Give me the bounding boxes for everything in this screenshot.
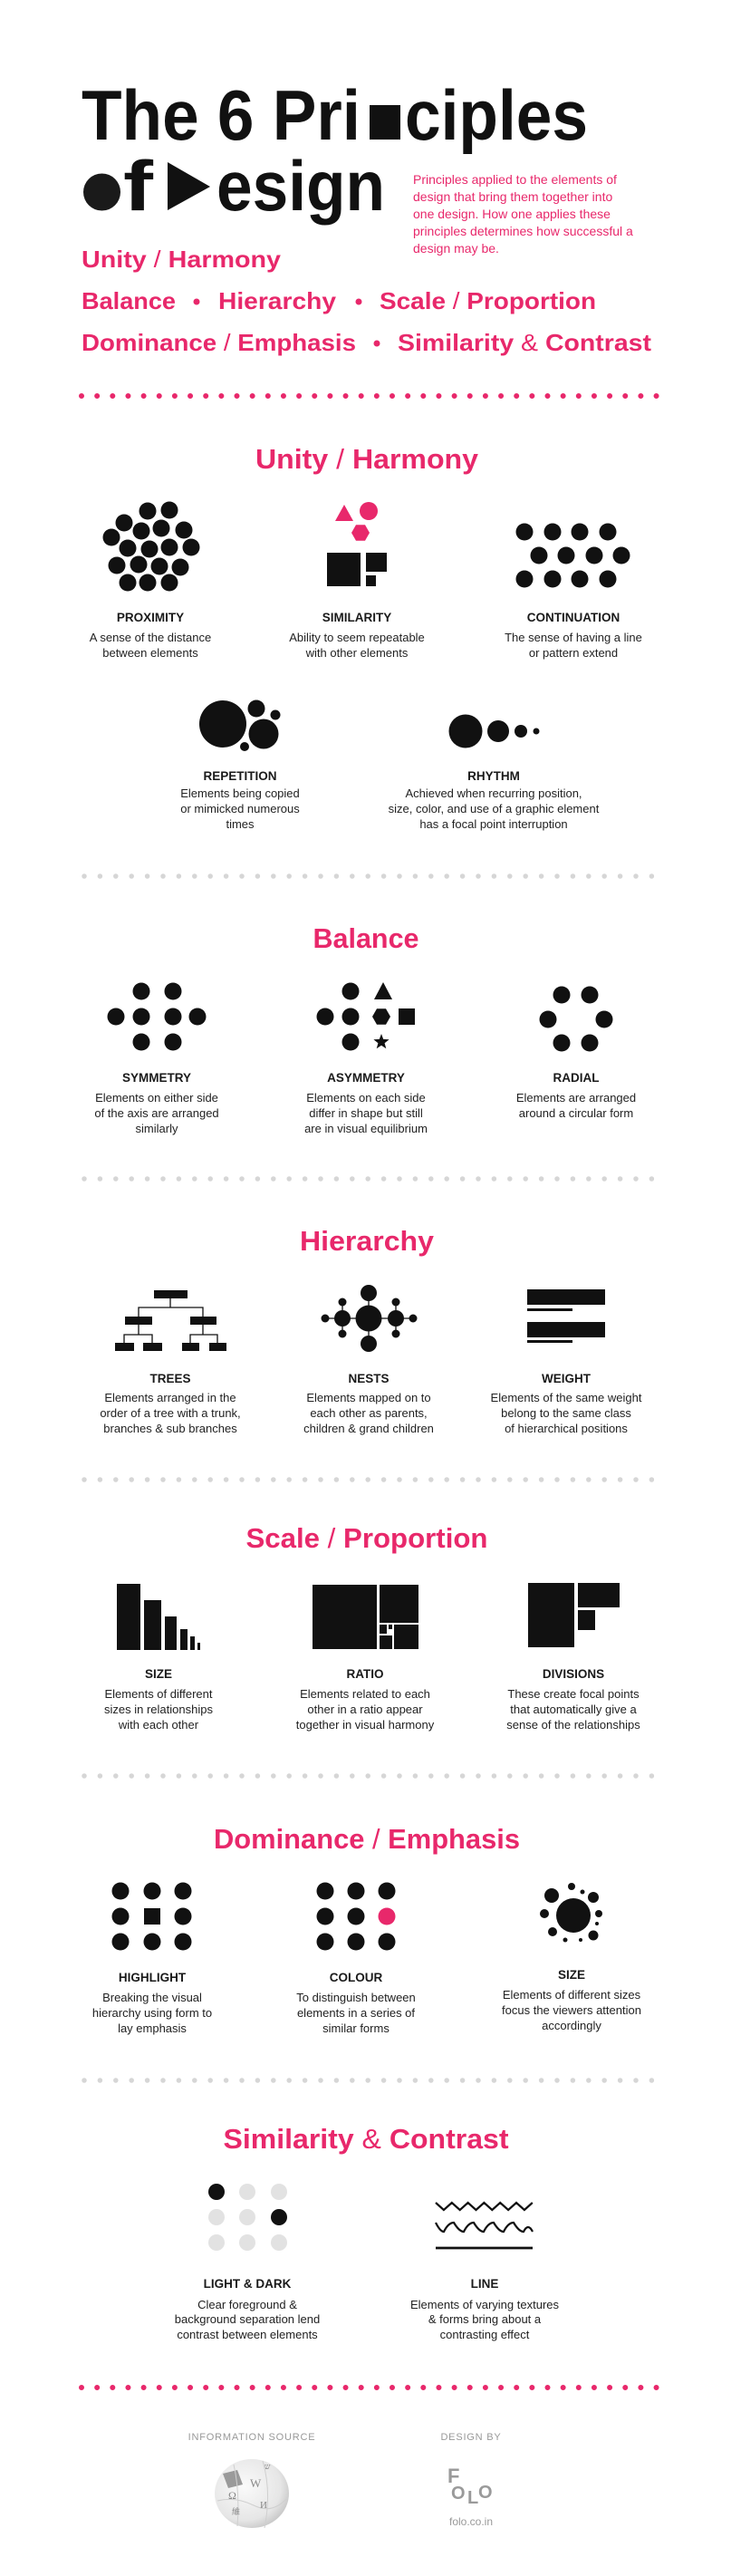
icon: wikipedia globe [215,2459,289,2528]
text: light and dark: contrast between elements [177,2328,318,2341]
text: nests [303,1372,434,1435]
icon: continuation [516,524,630,587]
intro text: principles determines how successful a [413,224,633,238]
text: weight: Elements of the same weight [491,1391,642,1404]
text: similarity: Ability to seem repeatable [289,631,425,644]
text: similarity: with other elements [305,646,409,660]
principles list: Scale / Proportion [380,287,596,314]
icon: line [436,2203,533,2248]
heading: Unity / Harmony: Unity / Harmony [255,443,479,475]
text: rhythm [389,769,600,831]
icon: weight [527,1289,605,1343]
text: divisions: These create focal points [507,1687,640,1701]
icon: proximity [103,502,199,591]
text: similarity [289,611,425,660]
text: symmetry [94,1071,219,1135]
logo: FOLO: F [447,2465,459,2487]
text: highlight: Breaking the visual [102,1991,202,2004]
title: ciples [405,75,588,155]
principles list: Hierarchy [218,287,337,314]
text: nests: each other as parents, [310,1406,428,1420]
icon: size emphasis [540,1883,602,1943]
text: asymmetry: differ in shape but still [309,1106,423,1120]
text: rhythm: size, color, and use of a graphic element [389,802,600,815]
text: line: contrasting effect [440,2328,530,2341]
text: weight: belong to the same class [501,1406,631,1420]
text: size emphasis [502,1968,641,2032]
text: size: sizes in relationships [104,1703,213,1716]
text: proximity: A sense of the distance [90,631,211,644]
icon: similarity [327,502,387,586]
text: divisions: sense of the relationships [506,1718,640,1732]
text: highlight: lay emphasis [118,2021,187,2035]
icon: symmetry [107,982,207,1051]
text: colour: COLOUR [330,1971,382,1984]
text: line [410,2277,560,2341]
principles list [82,246,651,356]
icon: wikipedia globe: И [260,2500,267,2511]
principles list: Similarity & Contrast [398,329,651,356]
text: colour: similar forms [322,2021,390,2035]
title [82,75,588,226]
title: f [123,146,154,226]
intro text: one design. How one applies these [413,207,611,221]
text: ratio: other in a ratio appear [307,1703,423,1716]
heading: Dominance / Emphasis: Dominance / Emphasis [214,1823,520,1855]
text: divisions [506,1667,640,1732]
text: light and dark: background separation lend [175,2312,320,2326]
text: repetition: REPETITION [203,769,277,783]
text: size: with each other [118,1718,199,1732]
text: radial [516,1071,636,1120]
text: similarity: SIMILARITY [322,611,391,624]
icon: rhythm [449,714,540,748]
icon: trees [115,1290,226,1351]
text: size: SIZE [145,1667,172,1681]
text: weight [491,1372,642,1435]
footer: design by [440,2432,502,2528]
icon: divisions [528,1583,620,1647]
heading: Hierarchy: Hierarchy [300,1225,435,1257]
text: proximity: PROXIMITY [117,611,184,624]
text: size emphasis: Elements of different sizes [503,1988,641,2002]
footer: design by: DESIGN BY [440,2432,502,2443]
text: nests: children & grand children [303,1422,434,1435]
text: highlight: hierarchy using form to [92,2006,212,2020]
icon: highlight [112,1883,192,1950]
text: trees: TREES [149,1372,191,1385]
text: divisions: DIVISIONS [543,1667,604,1681]
text: symmetry: similarly [136,1122,178,1135]
text: continuation: or pattern extend [529,646,618,660]
text: repetition: Elements being copied [180,786,300,800]
text: trees: order of a tree with a trunk, [100,1406,241,1420]
text: rhythm: RHYTHM [467,769,520,783]
text: rhythm: has a focal point interruption [419,817,568,831]
text: ratio: RATIO [346,1667,384,1681]
text: symmetry: SYMMETRY [122,1071,191,1085]
principles list: Balance [82,287,176,314]
text: proximity: between elements [102,646,198,660]
text: line: LINE [471,2277,498,2291]
text: divisions: that automatically give a [510,1703,638,1716]
footer: design by: folo.co.in [449,2515,493,2528]
text: light and dark: LIGHT & DARK [204,2277,292,2291]
text: rhythm: Achieved when recurring position, [405,786,582,800]
text: line: & forms bring about a [428,2312,542,2326]
text: ratio: Elements related to each [300,1687,430,1701]
intro text: Principles applied to the elements of [413,172,617,187]
text: continuation [505,611,642,660]
text: symmetry: Elements on either side [95,1091,218,1105]
icon: light and dark [208,2184,287,2251]
footer: information source [188,2432,315,2528]
logo: FOLO: O [451,2484,466,2504]
logo: FOLO: L [467,2488,478,2508]
text: continuation: The sense of having a line [505,631,642,644]
text: size: Elements of different [105,1687,213,1701]
icon: repetition [199,699,281,751]
footer: information source: INFORMATION SOURCE [188,2432,315,2443]
heading: Scale / Proportion: Scale / Proportion [246,1522,487,1554]
text: repetition: or mimicked numerous [180,802,300,815]
text: trees: Elements arranged in the [104,1391,236,1404]
text: radial: Elements are arranged [516,1091,636,1105]
intro text [413,172,633,256]
text: nests: NESTS [348,1372,390,1385]
text: highlight: HIGHLIGHT [119,1971,187,1984]
heading: Similarity & Contrast: Similarity & Contrast [223,2123,509,2155]
principles list: Unity / Harmony [82,246,282,273]
icon: wikipedia globe: ש [265,2462,271,2471]
text: symmetry: of the axis are arranged [94,1106,219,1120]
icon: wikipedia globe: Ω [228,2489,236,2502]
text: repetition [180,769,300,831]
text: trees [100,1372,241,1435]
text: nests: Elements mapped on to [306,1391,431,1404]
text: size emphasis: SIZE [558,1968,585,1982]
intro text: design may be. [413,241,499,256]
logo: FOLO [447,2465,493,2508]
text: asymmetry: are in visual equilibrium [304,1122,428,1135]
text: trees: branches & sub branches [103,1422,237,1435]
text: colour: To distinguish between [296,1991,416,2004]
icon: radial [540,986,612,1051]
text: size emphasis: accordingly [542,2019,601,2032]
text: asymmetry [304,1071,428,1135]
text: light and dark [175,2277,320,2341]
text: repetition: times [226,817,255,831]
text: asymmetry: ASYMMETRY [327,1071,405,1085]
title: esign [216,146,385,226]
text: weight: WEIGHT [542,1372,592,1385]
text: proximity [90,611,211,660]
logo: FOLO: O [478,2483,493,2503]
text: continuation: CONTINUATION [527,611,620,624]
text: line: Elements of varying textures [410,2298,560,2311]
text: weight: of hierarchical positions [505,1422,628,1435]
text: asymmetry: Elements on each side [306,1091,426,1105]
title: The 6 Pri [82,75,361,155]
text: highlight [92,1971,212,2035]
text: light and dark: Clear foreground & [197,2298,297,2311]
text: size [104,1667,213,1732]
icon: ratio [313,1585,418,1649]
text: radial: RADIAL [553,1071,600,1085]
heading: Balance: Balance [313,922,418,954]
text: colour: elements in a series of [297,2006,415,2020]
icon: nests [321,1285,417,1352]
principles list: Dominance / Emphasis [82,329,356,356]
icon: colour [317,1883,395,1950]
icon: wikipedia globe: W [250,2476,262,2490]
intro text: design that bring them together into [413,189,612,204]
text: ratio: together in visual harmony [296,1718,435,1732]
text: colour [296,1971,416,2035]
text: size emphasis: focus the viewers attention [502,2003,641,2017]
text: radial: around a circular form [519,1106,633,1120]
icon: asymmetry [317,982,415,1051]
text: ratio [296,1667,435,1732]
icon: wikipedia globe: 維 [232,2505,240,2517]
icon: size bars [117,1584,200,1650]
